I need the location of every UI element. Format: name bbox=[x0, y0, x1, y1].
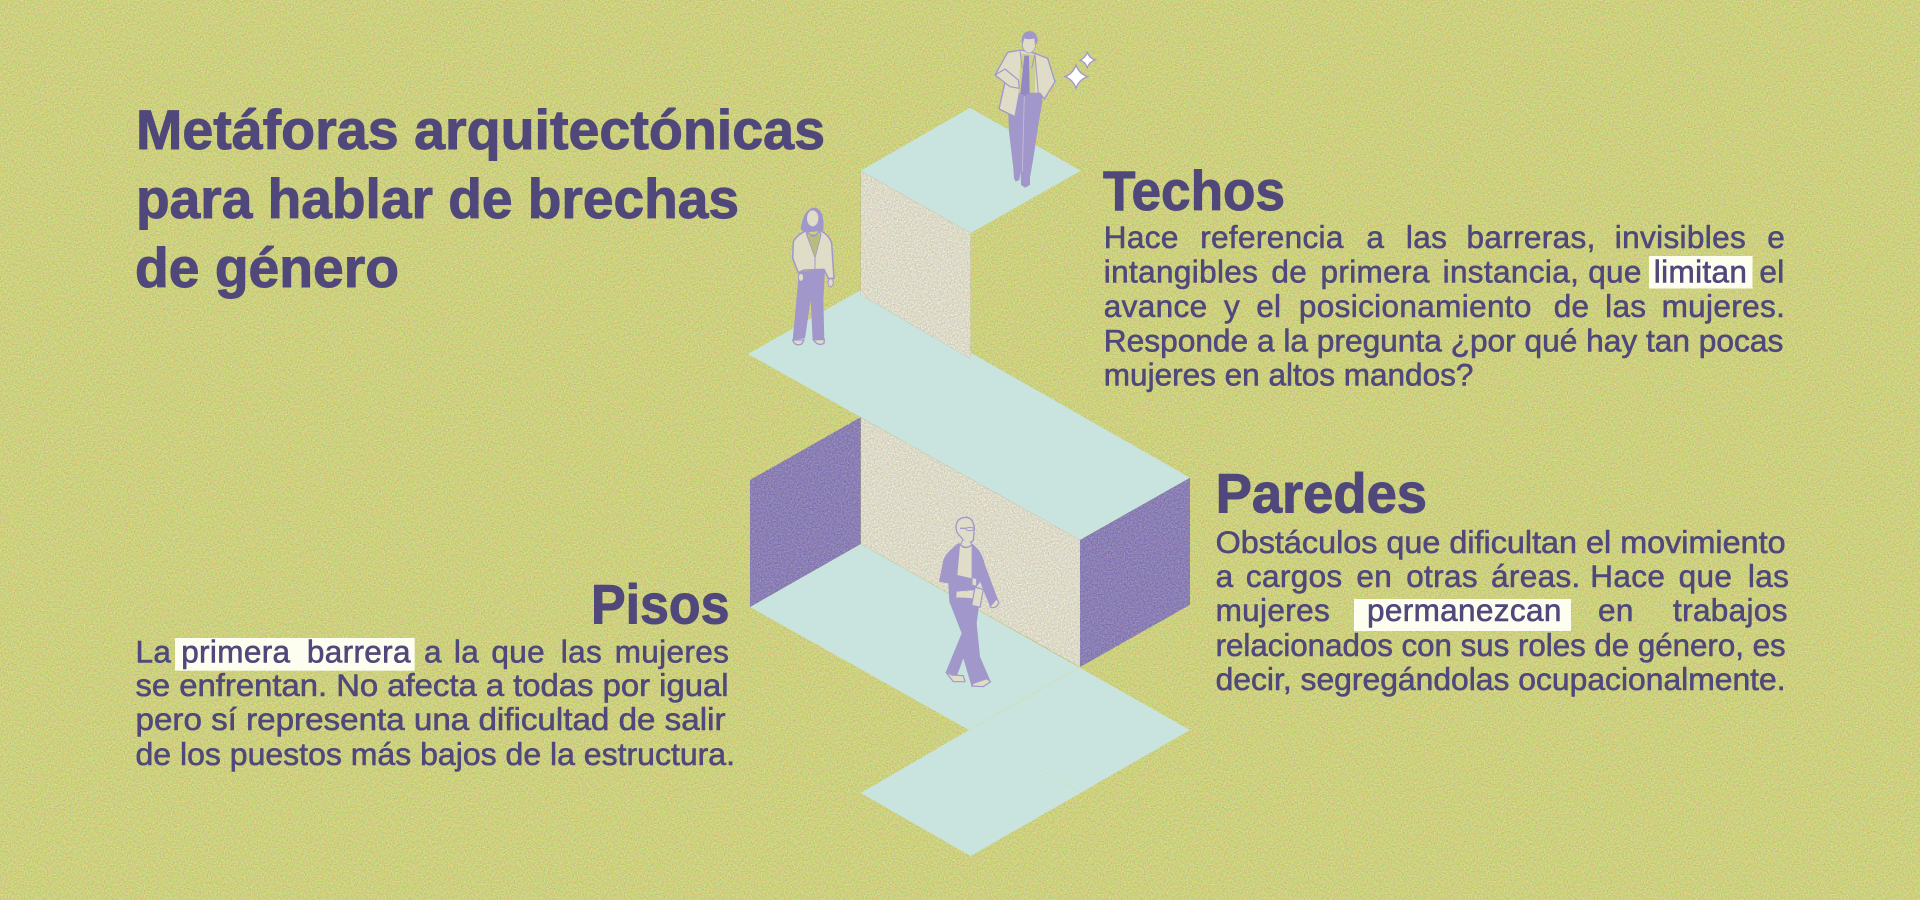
text block: Paredes description: trabajos bbox=[1673, 592, 1788, 628]
title bbox=[135, 98, 825, 299]
text block: Techos description: Responde a la pregunta ¿por qué hay tan pocas bbox=[1104, 322, 1783, 358]
floor: middle tile bbox=[748, 290, 1190, 540]
text block: Techos description: limitan bbox=[1654, 254, 1747, 290]
text block: Pisos description: la bbox=[454, 634, 479, 670]
text block: Techos description: avance bbox=[1104, 288, 1207, 324]
text block: Techos description bbox=[1104, 219, 1785, 392]
text block: Techos description: mujeres. bbox=[1662, 288, 1785, 324]
text block: Paredes description: decir, segregándolas ocupacionalmente. bbox=[1216, 661, 1786, 697]
text block: Pisos description: primera bbox=[181, 634, 291, 670]
text block: Paredes description: cargos bbox=[1246, 558, 1343, 594]
text block: Techos description: referencia bbox=[1200, 219, 1344, 255]
text block: Pisos description: a bbox=[424, 634, 442, 670]
highlight: permanezcan bbox=[1354, 599, 1571, 631]
text block: Pisos description: mujeres bbox=[615, 634, 729, 670]
text block: Techos description: a bbox=[1366, 219, 1384, 255]
floor: upper tile (techos) bbox=[861, 108, 1081, 233]
text block: Paredes description: relacionados con sus roles de género, es bbox=[1216, 627, 1786, 663]
text block: Pisos description: que bbox=[491, 634, 545, 670]
title: para hablar de brechas bbox=[136, 167, 739, 230]
highlight: limitan bbox=[1649, 256, 1752, 288]
panel: Paredes bbox=[1216, 462, 1789, 697]
text block: Techos description: que bbox=[1588, 254, 1642, 290]
text block: Paredes description: otras bbox=[1406, 558, 1478, 594]
text block: Paredes description: a bbox=[1216, 558, 1234, 594]
panel: Techos bbox=[1103, 159, 1785, 392]
text block: Paredes description: Hace bbox=[1590, 558, 1665, 594]
wall: left purple wall bbox=[750, 417, 861, 607]
highlight: primera barrera bbox=[175, 638, 415, 671]
text block: Techos description: mujeres en altos mandos? bbox=[1104, 356, 1473, 392]
text block: Paredes description bbox=[1216, 524, 1789, 697]
text block: Techos description: las bbox=[1406, 219, 1447, 255]
wall: right purple wall bbox=[1080, 478, 1190, 667]
text block: Techos description: y bbox=[1224, 288, 1240, 324]
text block: Paredes description: en bbox=[1356, 558, 1392, 594]
text block: Techos description: el bbox=[1256, 288, 1281, 324]
text block: Techos description: barreras, bbox=[1466, 219, 1596, 255]
panel: Pisos bbox=[136, 572, 735, 772]
figure: walking woman on the lower floor bbox=[939, 517, 999, 687]
text block: Techos description: posicionamiento bbox=[1299, 288, 1532, 324]
text block: Techos description: invisibles bbox=[1615, 219, 1746, 255]
figure: man in suit on the top floor bbox=[995, 31, 1055, 188]
text block: Paredes description: permanezcan bbox=[1367, 592, 1562, 628]
text block: Techos description: las bbox=[1605, 288, 1646, 324]
text block: Paredes description: mujeres bbox=[1216, 592, 1330, 628]
heading: Paredes: Paredes bbox=[1216, 462, 1427, 525]
heading: Pisos: Pisos bbox=[591, 572, 730, 636]
text block: Paredes description: que bbox=[1679, 558, 1732, 594]
title: de género bbox=[135, 236, 399, 299]
text block: Pisos description: las bbox=[561, 634, 602, 670]
text block: Pisos description: barrera bbox=[307, 634, 411, 670]
figure: standing woman on the middle floor bbox=[793, 207, 834, 345]
text block: Techos description: instancia, bbox=[1443, 254, 1579, 290]
floor: lower tile (pisos) bbox=[750, 544, 1190, 856]
text block: Pisos description: se enfrentan. No afecta a todas por igual bbox=[136, 667, 728, 703]
text block: Techos description: de bbox=[1271, 254, 1307, 290]
text block: Techos description: Hace bbox=[1104, 219, 1179, 255]
text block: Pisos description bbox=[136, 634, 735, 772]
text block: Paredes description: en bbox=[1598, 592, 1634, 628]
heading: Techos: Techos bbox=[1103, 159, 1285, 222]
text block: Techos description: e bbox=[1767, 219, 1785, 255]
text block: Paredes description: Obstáculos que dificultan el movimiento bbox=[1216, 524, 1786, 560]
text block: Pisos description: La bbox=[136, 634, 171, 670]
illustration: isometric building of floors and walls bbox=[748, 108, 1190, 856]
title: Metáforas arquitectónicas bbox=[136, 98, 825, 161]
text block: Paredes description: las bbox=[1748, 558, 1789, 594]
wall: upper cream wall bbox=[861, 171, 971, 359]
text block: Techos description: primera bbox=[1320, 254, 1430, 290]
icon: sparkles beside the man bbox=[1065, 52, 1095, 88]
text block: Techos description: intangibles bbox=[1104, 254, 1258, 290]
text block: Pisos description: de los puestos más bajos de la estructura. bbox=[136, 736, 735, 772]
text block: Techos description: de bbox=[1554, 288, 1589, 324]
wall: lower cream wall bbox=[861, 417, 1080, 667]
text block: Paredes description: áreas. bbox=[1491, 558, 1581, 594]
text block: Pisos description: pero sí representa una dificultad de salir bbox=[136, 701, 726, 737]
text block: Techos description: el bbox=[1759, 254, 1785, 290]
